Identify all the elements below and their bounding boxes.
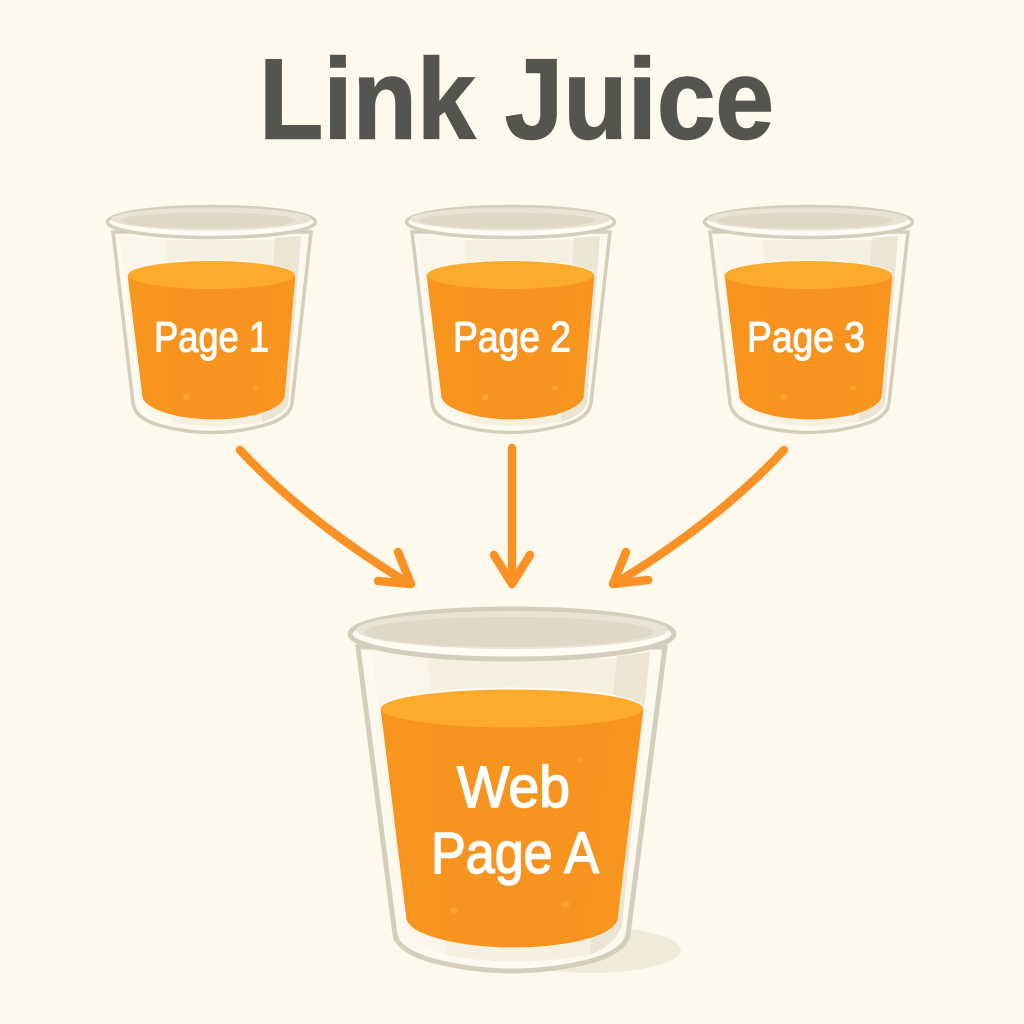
- glass rim: [350, 609, 674, 659]
- juice: [126, 260, 296, 419]
- arrow: Page 2 to Web Page A: [494, 448, 530, 584]
- cup: Web Page A: [350, 609, 681, 973]
- cup: Page 3: [704, 206, 912, 432]
- label: Page 2: [453, 314, 571, 362]
- label: Web: Web: [457, 755, 570, 820]
- label: Page 3: [747, 314, 865, 362]
- glass body: [358, 647, 665, 971]
- label: Page 1: [154, 314, 269, 362]
- arrow: Page 1 to Web Page A: [240, 450, 411, 584]
- arrow: Page 3 to Web Page A: [613, 450, 784, 584]
- title: Link Juice: [259, 36, 774, 163]
- cup: Page 1: [108, 206, 316, 432]
- juice: [379, 688, 645, 947]
- glass rim: [108, 206, 316, 238]
- label: Page A: Page A: [431, 821, 599, 886]
- cup: Page 2: [406, 206, 614, 432]
- shadow: [499, 927, 681, 973]
